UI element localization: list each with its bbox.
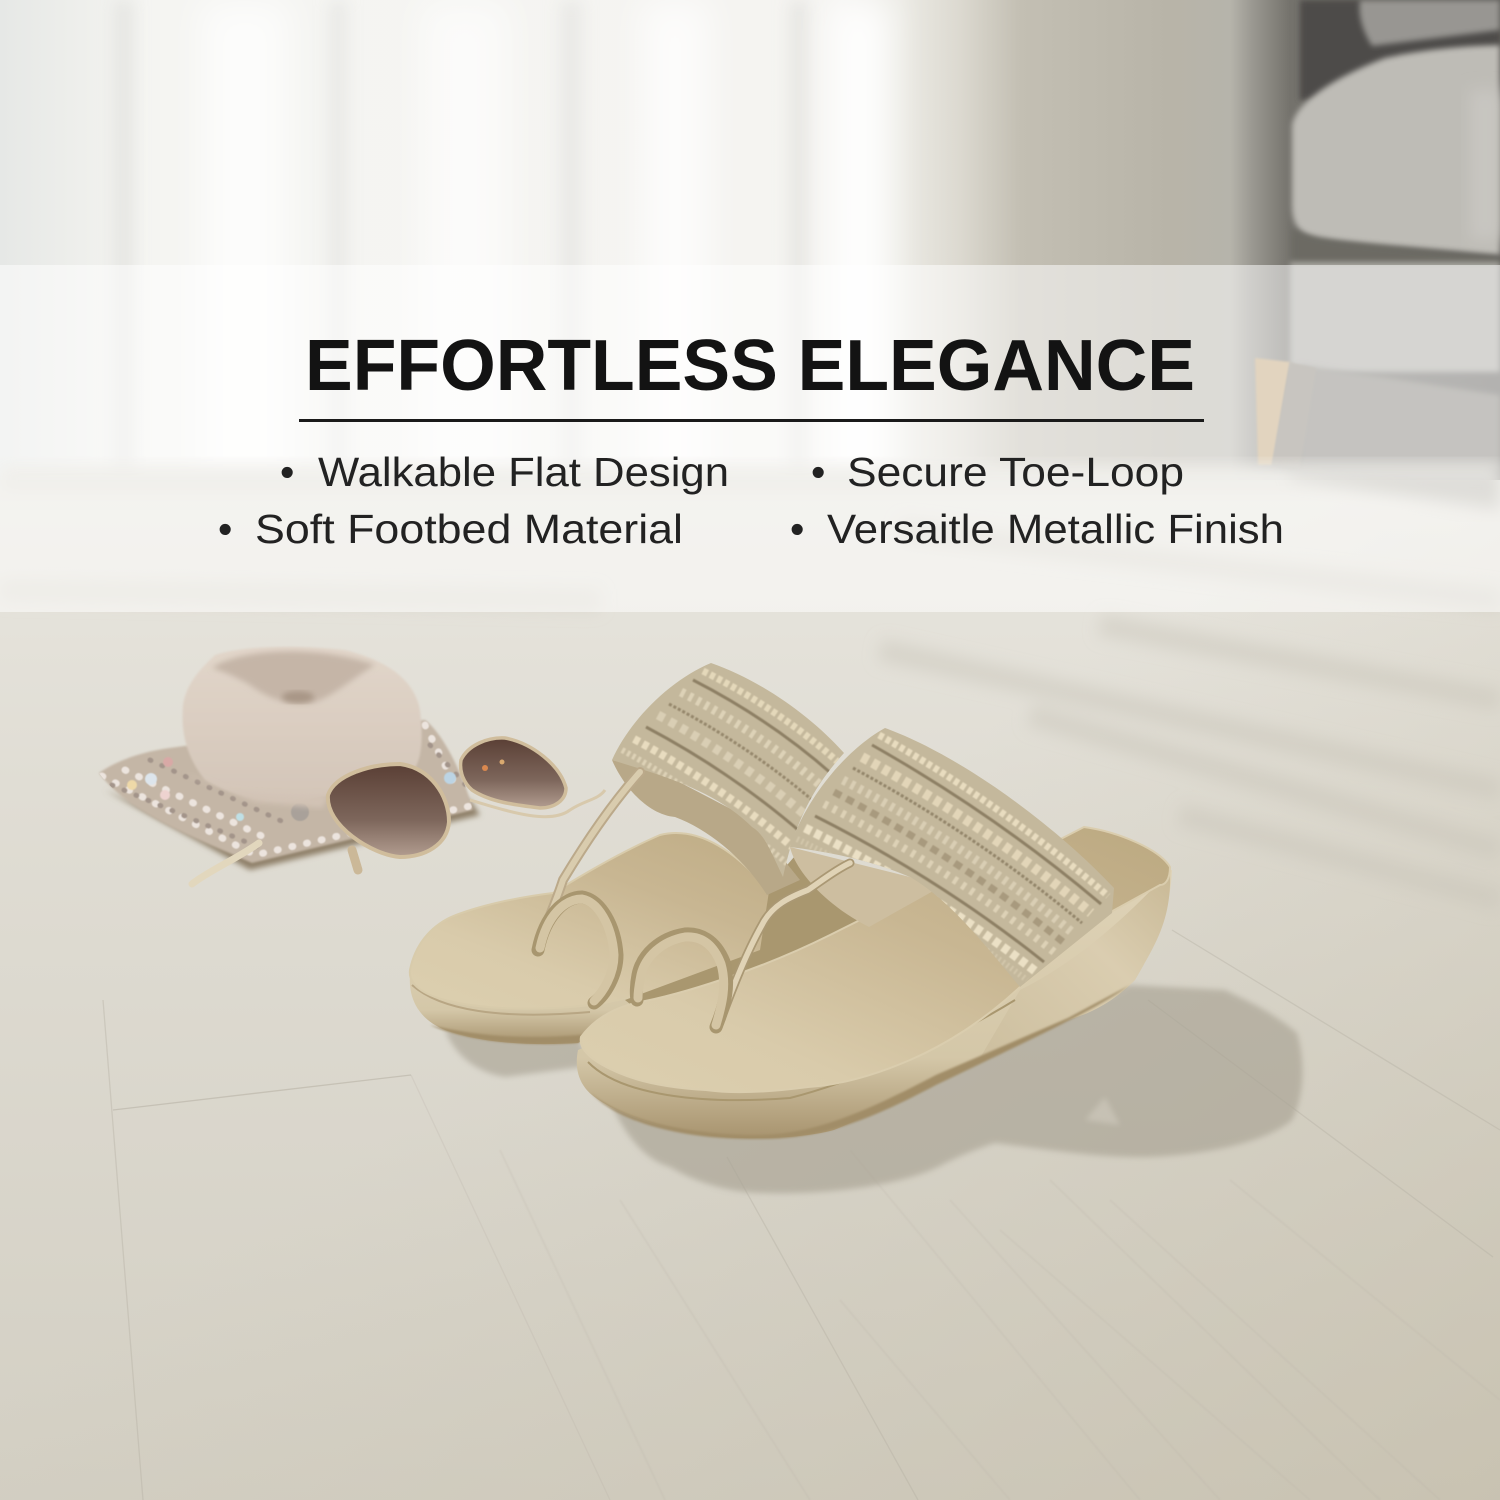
sunglasses	[328, 738, 605, 870]
title rule	[299, 419, 1204, 422]
right sandal toe strap and loop	[636, 863, 850, 1027]
floor	[0, 465, 1500, 1500]
left sandal upper band	[612, 663, 844, 877]
right sandal footbed	[581, 827, 1170, 1092]
bullet: versatile metallic finish: Versaitle Metallic Finish	[827, 506, 1284, 552]
shadow under sandals	[445, 985, 1302, 1193]
left sandal sole	[410, 930, 700, 1044]
translucent text band	[0, 265, 1500, 612]
bullet: soft footbed material: Soft Footbed Material	[255, 506, 683, 552]
title: EFFORTLESS ELEGANCE	[305, 326, 1195, 406]
right sandal upper band	[790, 728, 1114, 987]
bullet: walkable flat design: •	[280, 449, 294, 495]
sofa	[1255, 0, 1500, 470]
left sandal	[410, 663, 885, 1044]
right sandal sole and wedge	[577, 870, 1172, 1138]
bullet: secure toe-loop: •	[811, 449, 825, 495]
bullet: versatile metallic finish: •	[790, 506, 804, 552]
feature bullets	[218, 449, 1284, 552]
cloth bundle	[183, 647, 422, 808]
right sandal band lining	[790, 847, 935, 927]
gap between sandals	[625, 850, 885, 1012]
bullet: soft footbed material: •	[218, 506, 232, 552]
background: curtained wall	[0, 0, 1500, 620]
bullet: walkable flat design: Walkable Flat Design	[318, 449, 729, 495]
bullet: secure toe-loop: Secure Toe-Loop	[847, 449, 1184, 495]
left sandal band lining	[612, 760, 800, 895]
left sandal toe strap and loop	[538, 772, 640, 1003]
pouch	[99, 720, 480, 884]
left sandal footbed	[410, 833, 869, 1009]
right sandal	[577, 728, 1172, 1139]
pouch and cloth accessories	[99, 647, 605, 884]
